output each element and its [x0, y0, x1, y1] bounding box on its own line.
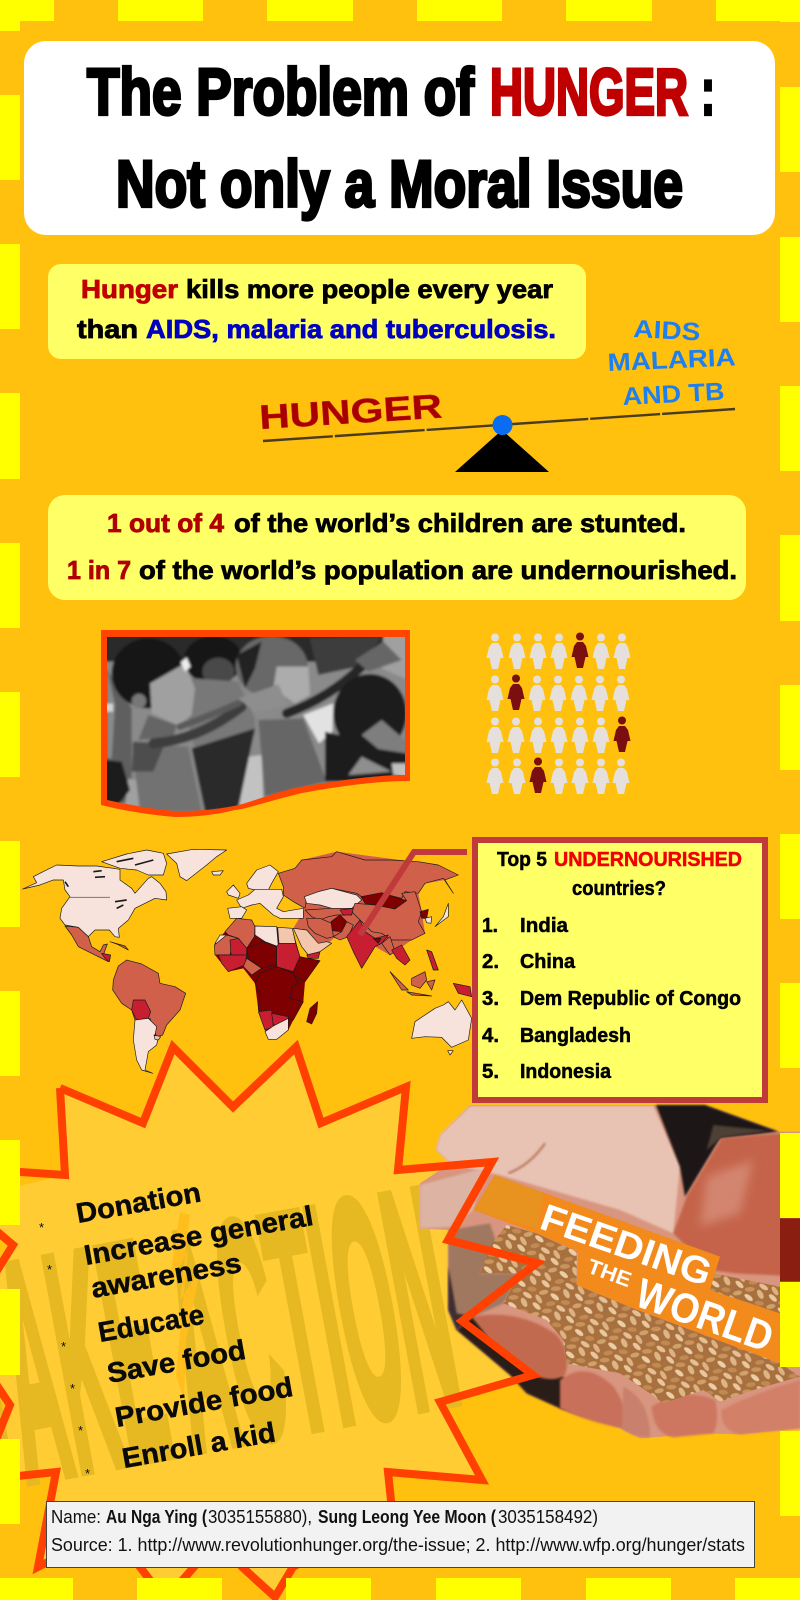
action list	[39, 1177, 316, 1481]
source box	[46, 1502, 754, 1568]
action list: *	[61, 1339, 66, 1354]
left child	[138, 715, 177, 740]
source box: 3035158492)	[498, 1507, 598, 1527]
middle child	[184, 637, 240, 680]
title text: Not only a Moral Issue	[116, 146, 683, 220]
action list: Provide food	[113, 1371, 295, 1433]
source box: Au Nga Ying (	[106, 1507, 207, 1527]
grain pile	[480, 1225, 800, 1403]
south and east asia	[293, 903, 472, 997]
panel heading: UNDERNOURISHED	[554, 849, 742, 871]
callout: hunger kills more: Hunger	[81, 274, 178, 304]
africa	[214, 918, 320, 1039]
action list: Enroll a kid	[120, 1416, 278, 1474]
connector from india to list	[360, 852, 467, 935]
label: aids malaria and tb	[607, 315, 736, 411]
orange banner	[473, 1175, 780, 1363]
row 3	[486, 718, 610, 753]
country list: India	[520, 915, 569, 937]
starburst outline	[0, 1047, 537, 1600]
country list: 4.	[482, 1025, 499, 1047]
callout: hunger kills more: AIDS, malaria and tuberculosis.	[146, 314, 556, 344]
title text: HUNGER	[490, 54, 688, 128]
right child	[258, 718, 327, 797]
highlighted people	[508, 632, 630, 793]
world map: americas	[23, 849, 227, 1073]
panel heading	[497, 849, 742, 900]
callout: hunger kills more: kills more people every year	[186, 274, 553, 304]
panel: top 5 undernourished	[475, 840, 765, 1100]
back right	[310, 637, 382, 675]
source box: Sung Leong Yee Moon (	[318, 1507, 496, 1527]
action list: Donation	[74, 1177, 203, 1229]
action list: Increase general	[82, 1200, 316, 1271]
country list: Bangladesh	[520, 1025, 631, 1047]
source box: Name:	[51, 1507, 101, 1527]
starburst fill	[0, 1047, 537, 1600]
action list: *	[78, 1423, 83, 1438]
arms	[153, 707, 242, 743]
callout: hunger kills more	[48, 264, 586, 359]
country list: 2.	[482, 951, 499, 973]
hand silhouette	[420, 1105, 800, 1438]
row 1	[486, 634, 630, 669]
banner text: feeding the world	[535, 1197, 780, 1361]
source box: Source: 1. http://www.revolutionhunger.org/the-issue; 2. http://www.wfp.org/hunger/stats	[51, 1535, 745, 1555]
country list: Indonesia	[520, 1061, 612, 1083]
label: aids malaria and tb: AIDS	[633, 315, 701, 346]
source box: 3035155880),	[208, 1507, 312, 1527]
callout: stunted statistics: of the world’s children are stunted.	[234, 508, 686, 538]
photo: hands holding grain	[420, 1105, 800, 1438]
country list: China	[520, 951, 576, 973]
label: aids malaria and tb: MALARIA	[607, 343, 736, 377]
title text: :	[701, 54, 715, 128]
country list: 3.	[482, 988, 499, 1010]
country list: 1.	[482, 915, 498, 937]
photo: hungry children	[101, 630, 410, 817]
right dark head	[333, 674, 407, 753]
seesaw beam	[263, 409, 735, 441]
title text	[87, 54, 715, 220]
europe	[227, 865, 303, 918]
banner text: feeding the world: FEEDING	[535, 1197, 717, 1295]
action list: *	[39, 1220, 44, 1235]
fingers	[472, 1315, 567, 1379]
russia and central asia	[278, 852, 458, 940]
seesaw pivot	[492, 415, 512, 435]
panel heading: countries?	[572, 878, 666, 900]
action list: *	[47, 1262, 52, 1277]
panel heading: Top 5	[497, 849, 547, 871]
country list: 5.	[482, 1061, 499, 1083]
australia	[412, 1000, 472, 1055]
row 2	[486, 676, 630, 711]
title panel	[24, 41, 775, 235]
country list	[482, 915, 741, 1083]
callout: hunger kills more: than	[77, 314, 138, 344]
label: hunger: HUNGER	[258, 388, 443, 437]
seesaw diagram	[258, 315, 736, 472]
row 4	[486, 758, 630, 794]
banner text: feeding the world: THE	[584, 1255, 634, 1292]
action list: awareness	[89, 1247, 244, 1304]
pictogram: 1 in 7 people	[486, 632, 630, 794]
callout: stunted statistics: of the world’s population are undernourished.	[139, 555, 737, 585]
label: aids malaria and tb: AND TB	[622, 378, 725, 411]
continent underlays	[215, 852, 458, 1039]
action list: Educate	[96, 1299, 206, 1348]
callout: stunted statistics: 1 out of 4	[107, 508, 225, 538]
callout: stunted statistics	[48, 495, 746, 600]
seesaw base	[455, 430, 549, 472]
action list: *	[70, 1381, 75, 1396]
cloth	[303, 703, 333, 743]
title text: The Problem of	[87, 54, 475, 128]
callout: stunted statistics: 1 in 7	[67, 555, 131, 585]
banner text: feeding the world: WORLD	[630, 1269, 780, 1361]
action list: *	[85, 1466, 90, 1481]
country list: Dem Republic of Congo	[520, 988, 741, 1010]
action list: Save food	[105, 1334, 248, 1389]
world map: europe asia africa australia	[214, 852, 472, 1055]
